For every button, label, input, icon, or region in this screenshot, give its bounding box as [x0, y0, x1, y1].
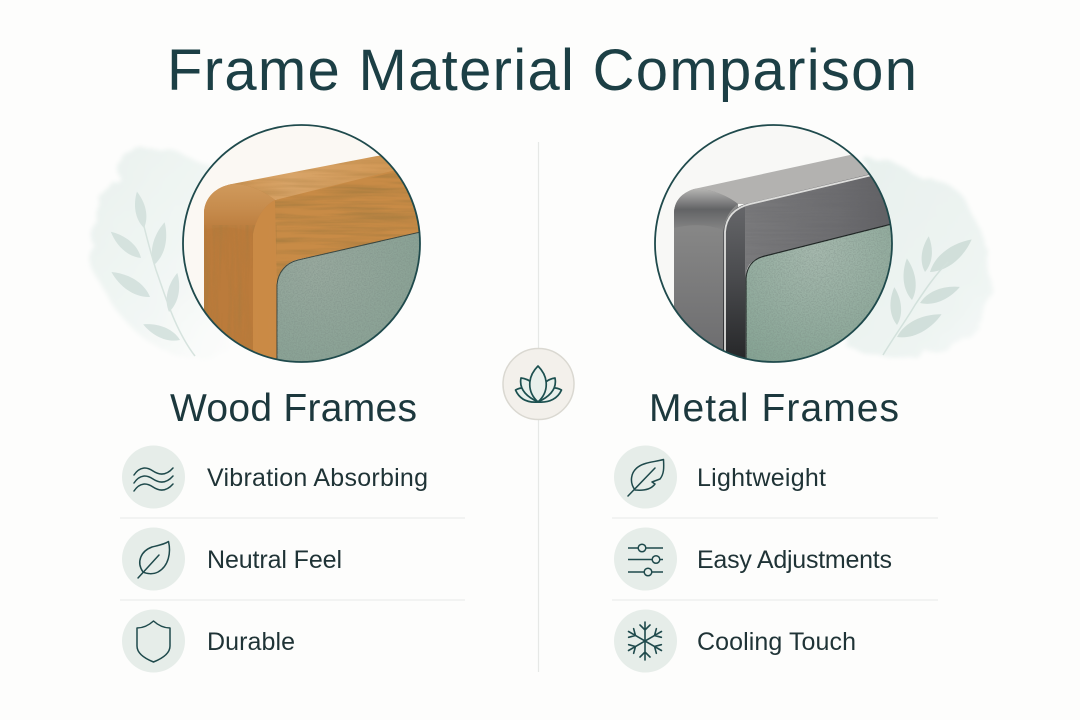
- icon: lotus badge: [503, 348, 574, 420]
- heading: metal frames: Metal Frames: [649, 387, 899, 430]
- icon: sliders: [614, 528, 677, 590]
- heading: wood frames: Wood Frames: [170, 387, 417, 430]
- metal top face: [694, 155, 868, 204]
- feature: durable: [122, 610, 295, 672]
- center divider: [538, 142, 540, 672]
- feature: lightweight: [614, 446, 826, 508]
- metal front rail: [745, 174, 890, 356]
- feature: neutral feel: [122, 528, 342, 590]
- wood frame photo circle: [180, 120, 430, 366]
- icon: feather: [614, 446, 677, 508]
- feature: easy adjustments: [614, 528, 892, 590]
- upholstery: metal side: [746, 222, 900, 366]
- wood post grain: [204, 225, 277, 320]
- wood left post: [204, 184, 277, 366]
- metal highlight edge: [725, 175, 872, 366]
- metal frame photo circle: [650, 120, 900, 366]
- feature: cooling touch: Cooling Touch: [697, 628, 856, 656]
- title: Frame Material Comparison: [167, 38, 917, 103]
- watercolor botanical: right: [845, 158, 991, 360]
- watercolor botanical: left: [89, 147, 230, 360]
- icon: leaf: [122, 528, 185, 590]
- wood inner strip: [253, 200, 277, 366]
- metal corner: [674, 189, 738, 230]
- feature: vibration absorbing: [122, 446, 428, 508]
- feature: neutral feel: Neutral Feel: [207, 546, 342, 574]
- wood front rail: [275, 171, 418, 303]
- feature: lightweight: Lightweight: [697, 464, 826, 492]
- icon: waves: [122, 446, 185, 508]
- feature: vibration absorbing: Vibration Absorbing: [207, 464, 428, 492]
- icon: shield: [122, 610, 185, 672]
- upholstery: wood side: [277, 231, 425, 366]
- panel: wood frames: [89, 120, 465, 672]
- feature: cooling touch: [614, 610, 856, 672]
- wood top face: [232, 156, 394, 200]
- wood corner: [204, 184, 274, 222]
- icon: snowflake: [614, 610, 677, 672]
- feature: easy adjustments: Easy Adjustments: [697, 546, 892, 574]
- metal left post: [674, 189, 746, 366]
- metal inner strip: [723, 204, 745, 366]
- panel: metal frames: [612, 120, 991, 672]
- feature: durable: Durable: [207, 628, 295, 656]
